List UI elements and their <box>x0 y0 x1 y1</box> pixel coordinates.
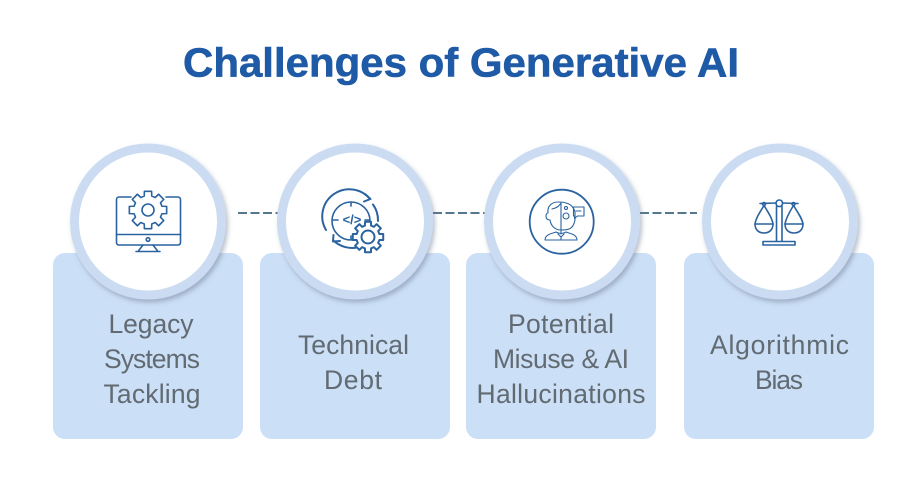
icon: monitor with gear <box>116 191 180 252</box>
icon: code cycle with gear <box>322 189 383 252</box>
label: Legacy Systems Tackling: Tackling <box>104 379 200 409</box>
connector: dashed line 2 <box>433 212 492 214</box>
connector: dashed line 3 <box>640 212 697 214</box>
label: Algorithmic Bias: Algorithmic <box>710 330 849 360</box>
panel: Technical Debt <box>260 253 450 439</box>
label: Legacy Systems Tackling <box>104 309 200 409</box>
connector: dashed line 1 <box>238 212 285 214</box>
circle badge: human and robot face <box>488 148 636 295</box>
circle badge: code cycle with gear <box>282 148 428 295</box>
label: Algorithmic Bias <box>710 330 849 395</box>
label: Algorithmic Bias: Bias <box>755 365 803 395</box>
panel: Algorithmic Bias <box>684 253 874 439</box>
label: Potential Misuse and AI Hallucinations: Potential <box>508 309 614 339</box>
icon: balance scales <box>755 200 803 245</box>
circle badge: balance scales <box>706 148 854 295</box>
icon: human and robot face <box>530 190 594 254</box>
label: Potential Misuse and AI Hallucinations: Hallucinations <box>476 379 646 409</box>
icon: code cycle with gear: </> <box>343 212 362 227</box>
label: Technical Debt: Technical <box>298 330 409 360</box>
label: Potential Misuse and AI Hallucinations <box>476 309 646 409</box>
label: Legacy Systems Tackling: Legacy <box>108 309 194 339</box>
label: Technical Debt: Debt <box>324 365 383 395</box>
title: Challenges of Generative AI <box>183 40 739 86</box>
label: Technical Debt <box>298 330 409 395</box>
panel: Legacy Systems Tackling <box>53 253 243 439</box>
circle badge: monitor with gear <box>74 148 222 295</box>
label: Potential Misuse and AI Hallucinations: Misuse & AI <box>493 344 629 374</box>
label: Legacy Systems Tackling: Systems <box>104 344 200 374</box>
panel: Potential Misuse and AI Hallucinations <box>466 253 656 439</box>
